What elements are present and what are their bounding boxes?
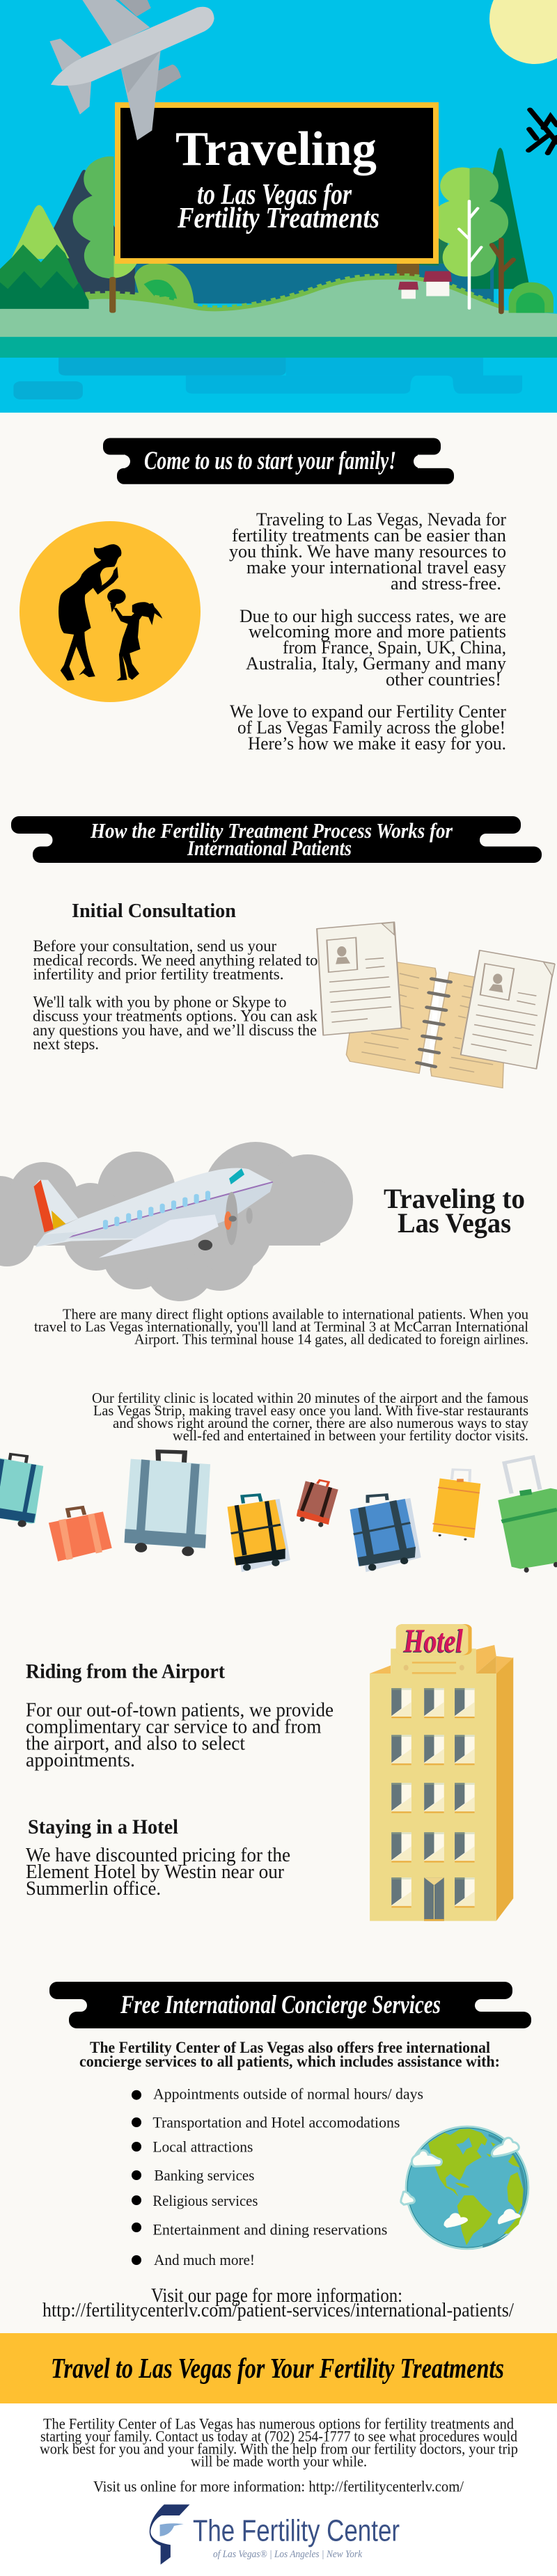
flight text: travel to Las Vegas internationally, you'll land at Terminal 3 at McCarran International xyxy=(34,1319,528,1335)
intro text block: welcoming more and more patients xyxy=(249,621,506,642)
intro text block: of Las Vegas Family across the globe! xyxy=(237,717,505,738)
icon: globe with clouds xyxy=(401,2126,529,2250)
title text: to Las Vegas for xyxy=(197,179,352,211)
ribbon heading: how the process works: International Patients xyxy=(187,836,352,860)
ribbon heading: concierge services xyxy=(28,1982,538,2028)
icon: hotel building: Hotel xyxy=(403,1623,464,1660)
consultation text: next steps. xyxy=(33,1035,99,1053)
heading: staying in a hotel: Staying in a Hotel xyxy=(28,1815,178,1838)
icon: row of luggage xyxy=(0,1452,557,1573)
consultation text: discuss your treatments options. You can ask xyxy=(33,1008,317,1024)
intro text block: make your international travel easy xyxy=(246,557,506,578)
bulleted services list: Appointments outside of normal hours/ days xyxy=(153,2085,423,2103)
riding text: complimentary car service to and from xyxy=(26,1717,322,1738)
bulleted services list: Entertainment and dining reservations xyxy=(152,2221,387,2239)
title frame xyxy=(118,105,436,261)
bulleted services list xyxy=(132,2085,423,2268)
flight text: Airport. This terminal house 14 gates, all dedicated to foreign airlines. xyxy=(134,1331,528,1348)
riding text: appointments. xyxy=(26,1750,135,1772)
intro text block xyxy=(229,509,506,754)
intro text block: Here’s how we make it easy for you. xyxy=(248,733,506,754)
closing text: starting your family. Contact us today at (702) 254-1777 to see what procedures would xyxy=(40,2428,517,2445)
clinic location text: Las Vegas Strip, making travel easy once you land. With five-star restaurants xyxy=(93,1402,528,1419)
intro text block: other countries! xyxy=(386,669,501,690)
closing text: The Fertility Center of Las Vegas has numerous options for fertility treatments and xyxy=(43,2415,514,2433)
intro text block: you think. We have many resources to xyxy=(229,541,506,562)
hotel text: Summerlin office. xyxy=(26,1878,161,1900)
bulleted services list: And much more! xyxy=(154,2251,255,2268)
riding text xyxy=(26,1700,334,1772)
title text xyxy=(175,122,379,234)
flight text: There are many direct flight options available to international patients. When you xyxy=(63,1306,528,1323)
visit page text: http://fertilitycenterlv.com/patient-services/international-patients/ xyxy=(42,2300,514,2321)
logo: the fertility center xyxy=(150,2504,400,2565)
intro text block: Due to our high success rates, we are xyxy=(240,606,506,626)
icon: mother and daughter silhouette in yellow circle xyxy=(19,521,201,702)
clinic location text: well-fed and entertained in between your fertility doctor visits. xyxy=(173,1427,528,1444)
bulleted services list: Transportation and Hotel accomodations xyxy=(152,2113,400,2131)
ribbon heading: how the process works xyxy=(0,816,542,863)
logo: the fertility center: of Las Vegas® | Los Angeles | New York xyxy=(213,2549,362,2560)
visit page text xyxy=(42,2285,514,2321)
clinic location text: Our fertility clinic is located within 20 minutes of the airport and the famous xyxy=(92,1390,528,1406)
closing text: will be made worth your while. xyxy=(191,2453,367,2470)
title text: Fertility Treatments xyxy=(177,202,379,234)
consultation text: We'll talk with you by phone or Skype to xyxy=(33,994,287,1010)
intro text block: We love to expand our Fertility Center xyxy=(230,701,506,722)
riding text: For our out-of-town patients, we provide xyxy=(26,1700,334,1722)
consultation text: any questions you have, and we’ll discuss the xyxy=(33,1021,317,1039)
icon: hotel building xyxy=(370,1623,513,1921)
bulleted services list: Banking services xyxy=(154,2166,254,2184)
bulleted services list: Local attractions xyxy=(152,2138,253,2155)
heading: riding from the airport: Riding from the Airport xyxy=(26,1660,225,1683)
ribbon heading: come to us xyxy=(84,438,462,484)
hotel text: We have discounted pricing for the xyxy=(26,1845,290,1866)
hotel text: Element Hotel by Westin near our xyxy=(26,1861,285,1883)
intro text block: fertility treatments can be easier than xyxy=(232,525,506,546)
riding text: the airport, and also to select xyxy=(26,1733,245,1755)
clinic location text xyxy=(92,1390,528,1444)
hotel text xyxy=(26,1845,290,1900)
ribbon heading: how the process works: How the Fertility Treatment Process Works for xyxy=(90,818,453,843)
heading: traveling to las vegas xyxy=(384,1183,525,1239)
consultation text: Before your consultation, send us your xyxy=(33,937,276,955)
bulleted services list: Religious services xyxy=(152,2192,258,2209)
ribbon heading: come to us: Come to us to start your family! xyxy=(144,447,396,475)
title text: Traveling xyxy=(175,122,377,176)
yellow call-to-action band xyxy=(0,2333,557,2403)
flight text xyxy=(34,1306,528,1348)
closing text: Visit us online for more information: http://fertilitycenterlv.com/ xyxy=(93,2478,464,2495)
consultation text: infertility and prior fertility treatments. xyxy=(33,966,284,983)
logo: the fertility center: The Fertility Center xyxy=(193,2514,400,2548)
icon: small black plane xyxy=(528,110,557,153)
heading: traveling to las vegas: Las Vegas xyxy=(398,1207,511,1239)
concierge intro text: The Fertility Center of Las Vegas also offers free international xyxy=(90,2039,490,2056)
closing text: work best for you and your family. With the help from our fertility doctors, your trip xyxy=(40,2440,518,2458)
icon: plane and cloud xyxy=(0,1142,353,1301)
consultation text: medical records. We need anything related to xyxy=(33,952,317,969)
closing text xyxy=(40,2415,518,2495)
header scene xyxy=(0,0,557,413)
consultation text xyxy=(33,937,317,1053)
intro text block: Australia, Italy, Germany and many xyxy=(246,653,506,674)
concierge intro text: concierge services to all patients, which includes assistance with: xyxy=(79,2053,500,2070)
intro text block: from France, Spain, UK, China, xyxy=(283,637,506,658)
visit page text: Visit our page for more information: xyxy=(151,2285,402,2307)
ribbon heading: concierge services: Free International Concierge Services xyxy=(120,1991,441,2019)
concierge intro text xyxy=(79,2039,500,2070)
clinic location text: and shows right around the corner, there are also numerous ways to stay xyxy=(113,1415,528,1431)
intro text block: Traveling to Las Vegas, Nevada for xyxy=(256,509,506,530)
icon: grey plane xyxy=(49,0,214,141)
heading: initial consultation: Initial Consultation xyxy=(72,900,236,922)
intro text block: and stress-free. xyxy=(391,573,501,594)
icon: notebook and records xyxy=(317,922,555,1088)
heading: traveling to las vegas: Traveling to xyxy=(384,1183,525,1214)
